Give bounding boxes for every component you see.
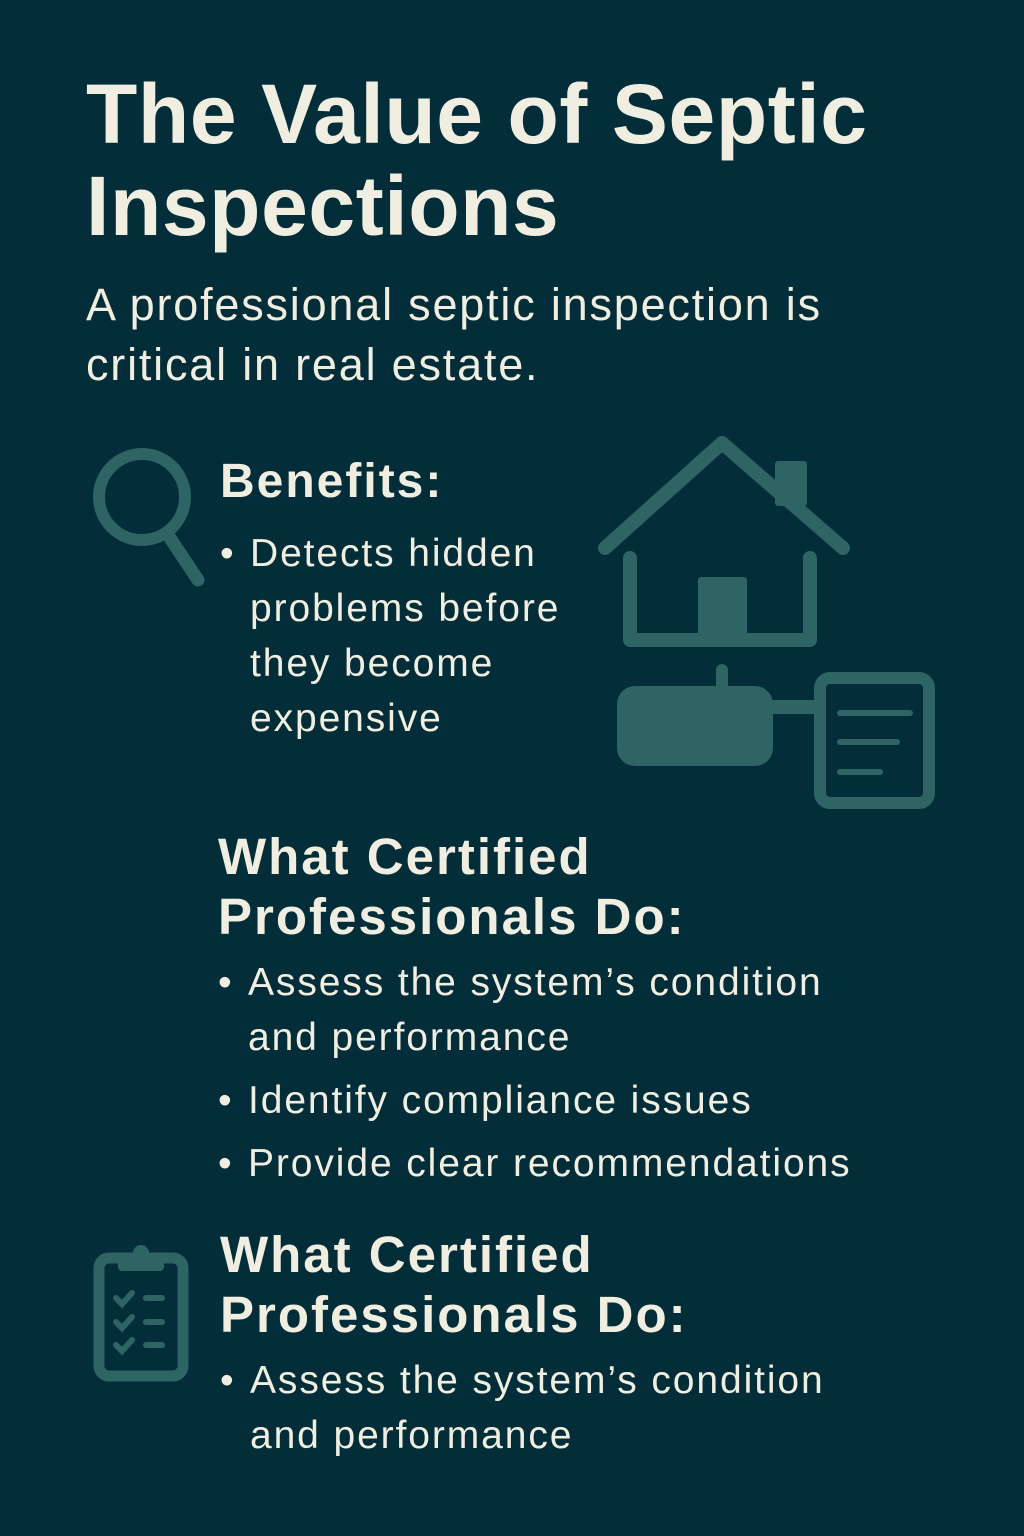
icon: magnifier <box>93 448 204 586</box>
bullets: benefits: they become <box>250 642 494 685</box>
bullets: and performance <box>248 1016 571 1059</box>
heading: Professionals Do: <box>218 888 686 945</box>
heading: What Certified <box>220 1226 594 1283</box>
bullets: Provide clear recommendations <box>248 1142 852 1185</box>
panel: benefits <box>220 455 560 740</box>
heading <box>218 828 686 945</box>
bullets: Identify compliance issues <box>248 1079 753 1122</box>
icon: clipboard <box>94 1245 188 1382</box>
heading: What Certified <box>218 828 592 885</box>
subtitle: A professional septic inspection is <box>86 279 822 330</box>
bullets <box>220 961 852 1185</box>
heading: Professionals Do: <box>220 1286 688 1343</box>
icon: house with septic tank and report <box>598 436 935 809</box>
bullets <box>222 1359 825 1457</box>
heading: benefits: Benefits: <box>220 455 443 508</box>
title: The Value of Septic <box>86 67 868 161</box>
title <box>86 67 868 253</box>
heading <box>220 1226 688 1343</box>
bullets: benefits: problems before <box>250 587 560 630</box>
title: Inspections <box>86 159 559 253</box>
subtitle: critical in real estate. <box>86 339 539 390</box>
subtitle <box>86 279 822 390</box>
bullets: Assess the system’s condition <box>250 1359 825 1402</box>
bullets: benefits <box>222 532 560 740</box>
panel: what certified professionals do <box>218 828 852 1185</box>
bullets: benefits: Detects hidden <box>250 532 537 575</box>
panel: what certified professionals do (repeat) <box>220 1226 825 1457</box>
bullets: benefits: expensive <box>250 697 443 740</box>
bullets: Assess the system’s condition <box>248 961 823 1004</box>
bullets: and performance <box>250 1414 573 1457</box>
